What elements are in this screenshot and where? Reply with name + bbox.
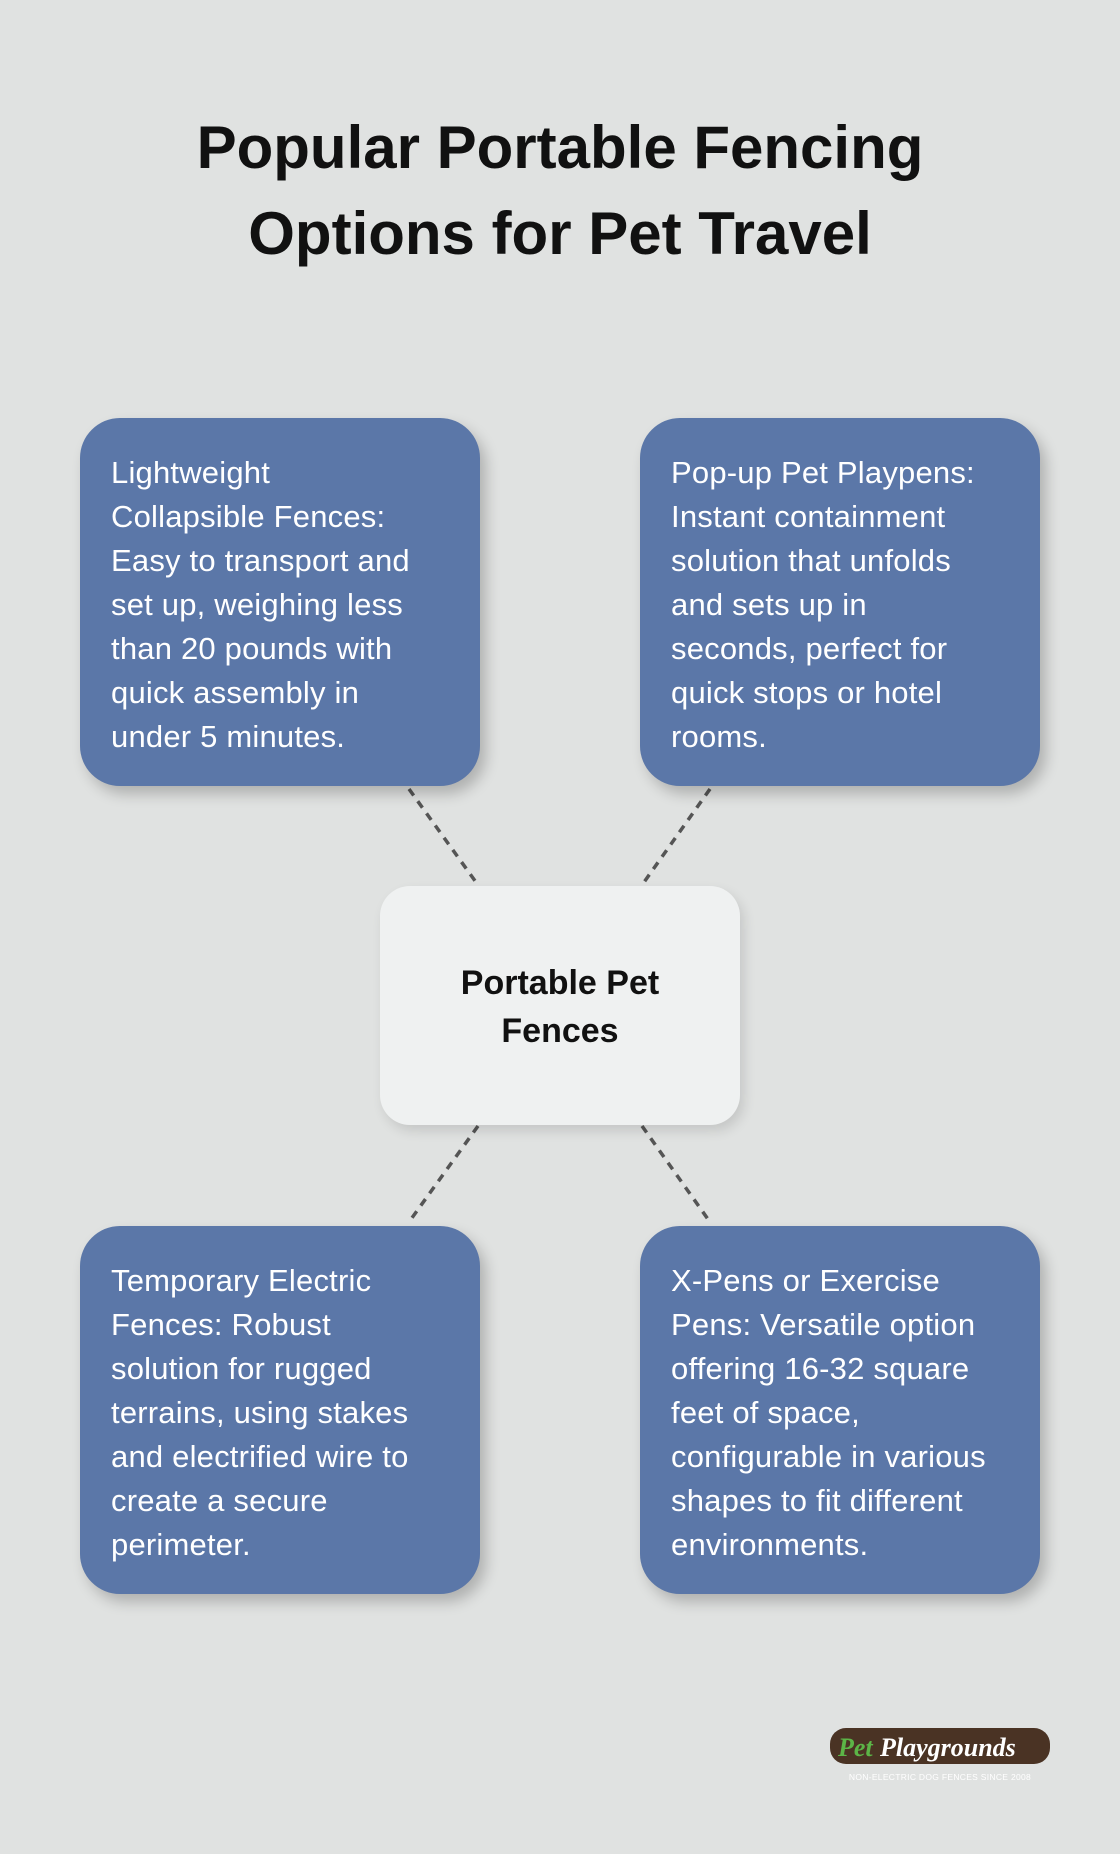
card: x-pens: configurable in various	[671, 1439, 986, 1474]
card: lightweight collapsible fences: than 20 pounds with	[111, 631, 392, 666]
center node: Portable Pet	[461, 964, 659, 1002]
card: pop-up pet playpens: quick stops or hotel	[671, 675, 942, 710]
card: pop-up pet playpens: Instant containment	[671, 499, 945, 534]
card: x-pens: offering 16-32 square	[671, 1351, 969, 1386]
title	[197, 114, 923, 267]
logo	[830, 1728, 1050, 1782]
center node: Fences	[501, 1012, 619, 1050]
card: pop-up pet playpens: Pop-up Pet Playpens:	[671, 455, 975, 490]
card: lightweight collapsible fences: Collapsible Fences:	[111, 499, 385, 534]
card: pop-up pet playpens	[640, 418, 1040, 786]
card: x-pens: environments.	[671, 1527, 868, 1562]
card: lightweight collapsible fences: set up, weighing less	[111, 587, 403, 622]
logo: Pet	[837, 1733, 873, 1762]
card: temporary electric fences: solution for rugged	[111, 1351, 372, 1386]
center node	[380, 886, 740, 1125]
card: pop-up pet playpens: rooms.	[671, 719, 767, 754]
card: pop-up pet playpens: seconds, perfect for	[671, 631, 947, 666]
card: x-pens: feet of space,	[671, 1395, 860, 1430]
card: x-pens: X-Pens or Exercise	[671, 1263, 940, 1298]
card: pop-up pet playpens: solution that unfolds	[671, 543, 951, 578]
logo: NON-ELECTRIC DOG FENCES SINCE 2008	[849, 1772, 1031, 1782]
card: temporary electric fences: terrains, using stakes	[111, 1395, 408, 1430]
card: temporary electric fences: create a secure	[111, 1483, 328, 1518]
card: x-pens: Pens: Versatile option	[671, 1307, 975, 1342]
card: temporary electric fences: Fences: Robust	[111, 1307, 331, 1342]
card: lightweight collapsible fences: Lightweight	[111, 455, 270, 490]
card: x-pens: shapes to fit different	[671, 1483, 963, 1518]
card: temporary electric fences: perimeter.	[111, 1527, 251, 1562]
card: x-pens	[640, 1226, 1040, 1594]
card: lightweight collapsible fences: under 5 minutes.	[111, 719, 345, 754]
title: Options for Pet Travel	[248, 200, 872, 267]
card: pop-up pet playpens: and sets up in	[671, 587, 867, 622]
card: lightweight collapsible fences	[80, 418, 480, 786]
card: temporary electric fences: and electrified wire to	[111, 1439, 409, 1474]
card: temporary electric fences	[80, 1226, 480, 1594]
card: temporary electric fences: Temporary Electric	[111, 1263, 371, 1298]
title: Popular Portable Fencing	[197, 114, 923, 181]
card: lightweight collapsible fences: Easy to transport and	[111, 543, 410, 578]
card: lightweight collapsible fences: quick assembly in	[111, 675, 359, 710]
logo: Playgrounds	[879, 1733, 1016, 1762]
